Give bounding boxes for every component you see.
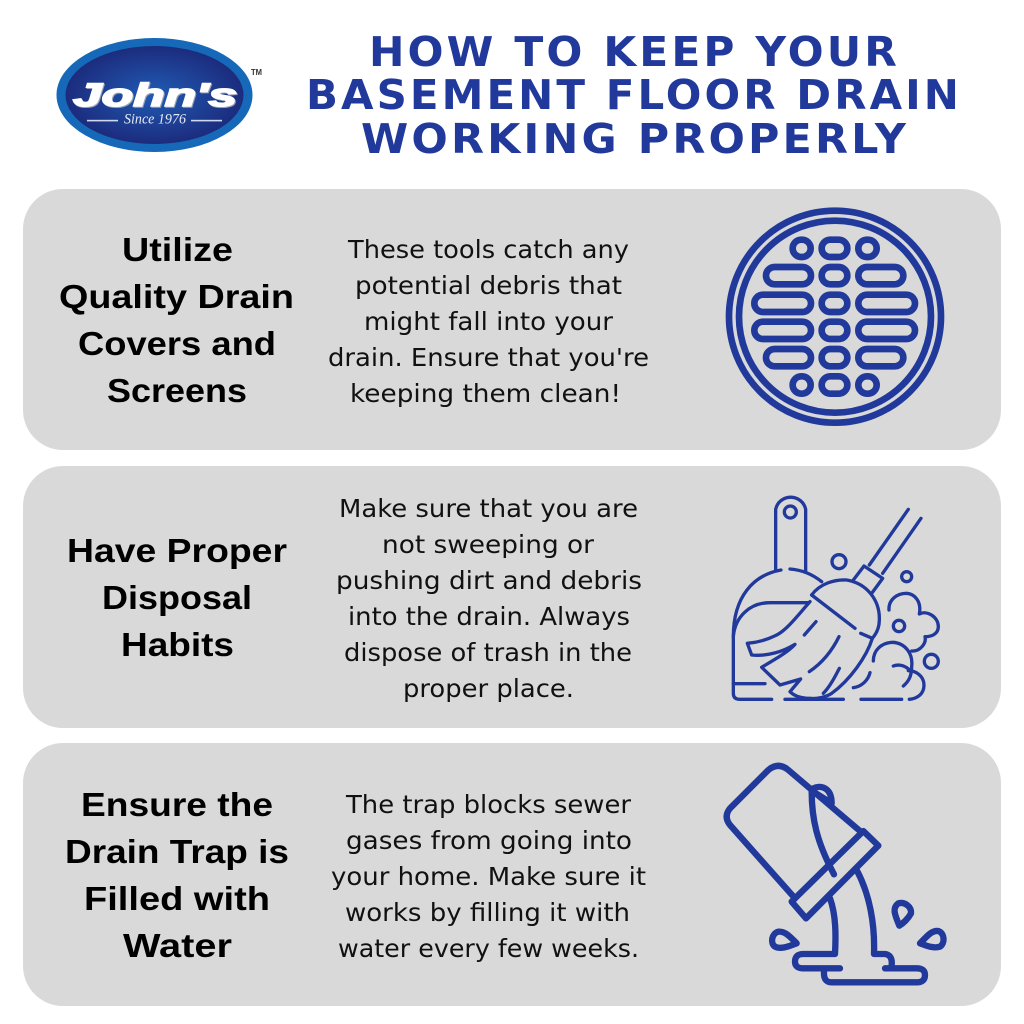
- panel: disposal habits: [23, 466, 1001, 728]
- heading: Utilize Quality Drain Covers and Screens: Utilize: [122, 231, 233, 268]
- text: drain trap description: your home. Make sure it: [331, 862, 646, 891]
- text: drain trap description: The trap blocks sewer: [345, 790, 632, 819]
- icon: round drain cover: [729, 211, 941, 423]
- text: drain covers description: potential debris that: [355, 271, 622, 300]
- text: drain covers description: drain. Ensure that you're: [328, 343, 649, 372]
- icon: broom and dustpan: [733, 497, 938, 699]
- heading: Have Proper Disposal Habits: Habits: [121, 626, 234, 663]
- text: disposal description: proper place.: [403, 674, 574, 703]
- text: drain covers description: keeping them clean!: [350, 379, 621, 408]
- heading: Ensure the Drain Trap is Filled with Water: Filled with: [84, 880, 270, 917]
- text: drain trap description: water every few weeks.: [338, 934, 639, 963]
- text: disposal description: pushing dirt and debris: [336, 566, 642, 595]
- logo: John's: TM: [251, 68, 262, 77]
- heading: Have Proper Disposal Habits: [67, 532, 287, 663]
- heading: Have Proper Disposal Habits: Have Proper: [67, 532, 287, 569]
- text: drain trap description: gases from going into: [346, 826, 632, 855]
- text: drain covers description: These tools catch any: [347, 235, 629, 264]
- panel: drain trap: [23, 743, 1001, 1006]
- heading: Ensure the Drain Trap is Filled with Water: Water: [123, 927, 232, 964]
- logo: John's: Since 1976: [124, 112, 186, 128]
- text: drain covers description: [328, 235, 649, 408]
- heading: Utilize Quality Drain Covers and Screens: [59, 231, 294, 409]
- title: HOW TO KEEP YOUR: [369, 28, 900, 76]
- logo: John's: [56, 38, 262, 152]
- title: [306, 28, 962, 163]
- text: drain covers description: might fall into your: [364, 307, 614, 336]
- title: BASEMENT FLOOR DRAIN: [306, 71, 962, 119]
- icon: bucket pouring water: [727, 766, 944, 982]
- heading: Ensure the Drain Trap is Filled with Water: Ensure the: [81, 786, 273, 823]
- heading: Ensure the Drain Trap is Filled with Water: [65, 786, 289, 964]
- title: WORKING PROPERLY: [361, 115, 909, 163]
- text: disposal description: Make sure that you are: [339, 494, 638, 523]
- text: drain trap description: works by filling it with: [345, 898, 630, 927]
- heading: Utilize Quality Drain Covers and Screens: Quality Drain: [59, 278, 294, 315]
- text: disposal description: dispose of trash in the: [344, 638, 632, 667]
- logo: John's: John's: [73, 77, 237, 113]
- text: disposal description: [336, 494, 642, 703]
- panel: drain covers and screens: [23, 189, 1001, 450]
- text: drain trap description: [331, 790, 646, 963]
- heading: Utilize Quality Drain Covers and Screens: Covers and: [78, 325, 276, 362]
- text: disposal description: into the drain. Always: [348, 602, 630, 631]
- logo: John's: John's: [74, 78, 238, 114]
- heading: Ensure the Drain Trap is Filled with Water: Drain Trap is: [65, 833, 289, 870]
- heading: Utilize Quality Drain Covers and Screens: Screens: [107, 372, 247, 409]
- heading: Have Proper Disposal Habits: Disposal: [102, 579, 252, 616]
- text: disposal description: not sweeping or: [382, 530, 595, 559]
